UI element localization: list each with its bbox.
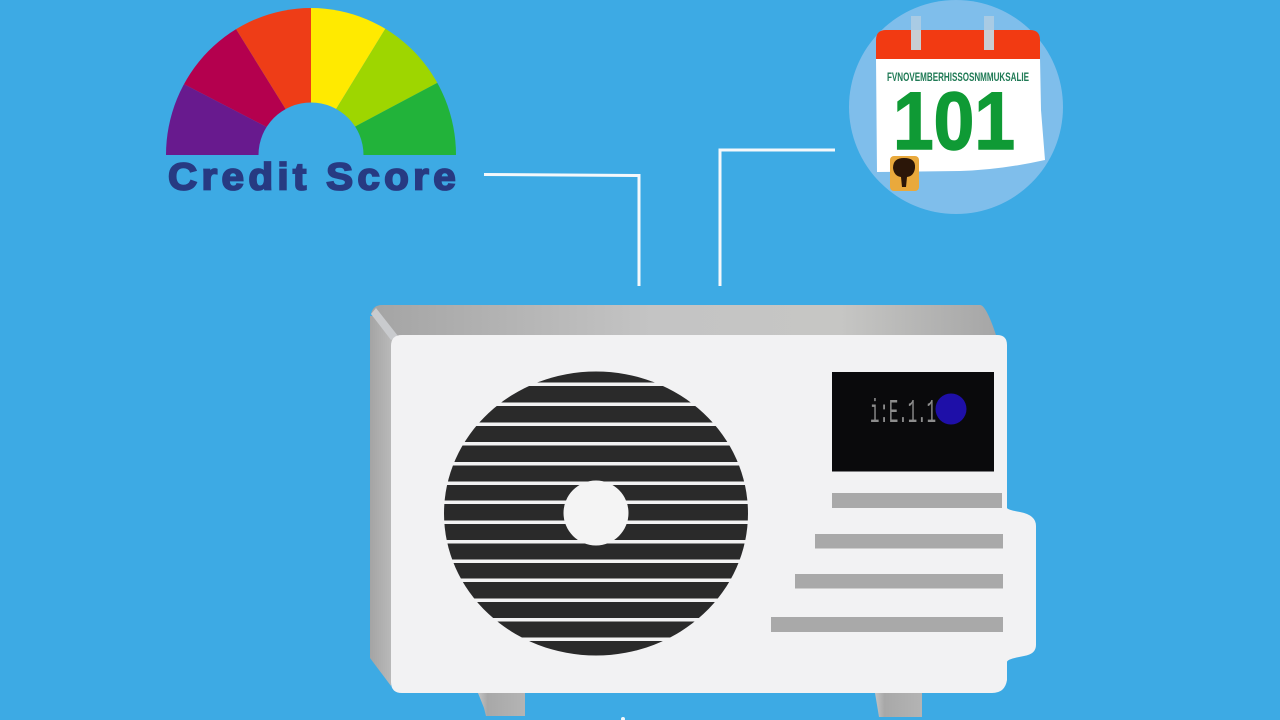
icon: calendar seal — [890, 156, 919, 191]
gauge centre cut-out — [258, 102, 364, 155]
gauge segment: orange — [236, 8, 311, 110]
heading: credit score: Credit Score — [168, 156, 460, 198]
calendar page — [876, 58, 1045, 172]
display panel: i:E.1.1 — [870, 395, 936, 432]
credit score gauge — [166, 8, 456, 155]
fan disc — [444, 372, 748, 656]
foot right — [875, 693, 922, 717]
air conditioner outdoor unit — [370, 305, 1036, 717]
fan stripes — [440, 382, 752, 641]
calendar header — [876, 30, 1040, 59]
calendar ring left — [911, 16, 921, 50]
vent bars — [771, 493, 1003, 632]
unit top face — [371, 305, 996, 337]
display screen — [832, 372, 994, 472]
connector: calendar to unit — [720, 150, 835, 286]
calendar badge circle — [849, 0, 1063, 214]
gauge segment: green — [355, 82, 456, 155]
unit side face — [370, 316, 395, 686]
small white mark — [621, 717, 625, 720]
fan grille — [440, 372, 752, 656]
calendar ring right — [984, 16, 994, 50]
fan hub — [564, 480, 628, 546]
unit top corner highlight — [371, 308, 398, 340]
display indicator — [936, 394, 966, 424]
calendar number: 101 — [893, 76, 1015, 167]
gauge segment: purple — [166, 84, 266, 155]
gauge segment: yellow — [311, 8, 386, 109]
gauge segment: crimson — [184, 29, 286, 127]
calendar small text: FVNOVEMBERHISSOSNMMUKSALIE — [887, 72, 1029, 84]
gauge segment: lime — [336, 28, 438, 126]
connector: credit score to unit — [484, 174, 639, 286]
display panel — [832, 372, 994, 472]
unit front panel — [391, 335, 1036, 693]
icon: calendar — [876, 16, 1045, 191]
foot left — [478, 693, 525, 716]
